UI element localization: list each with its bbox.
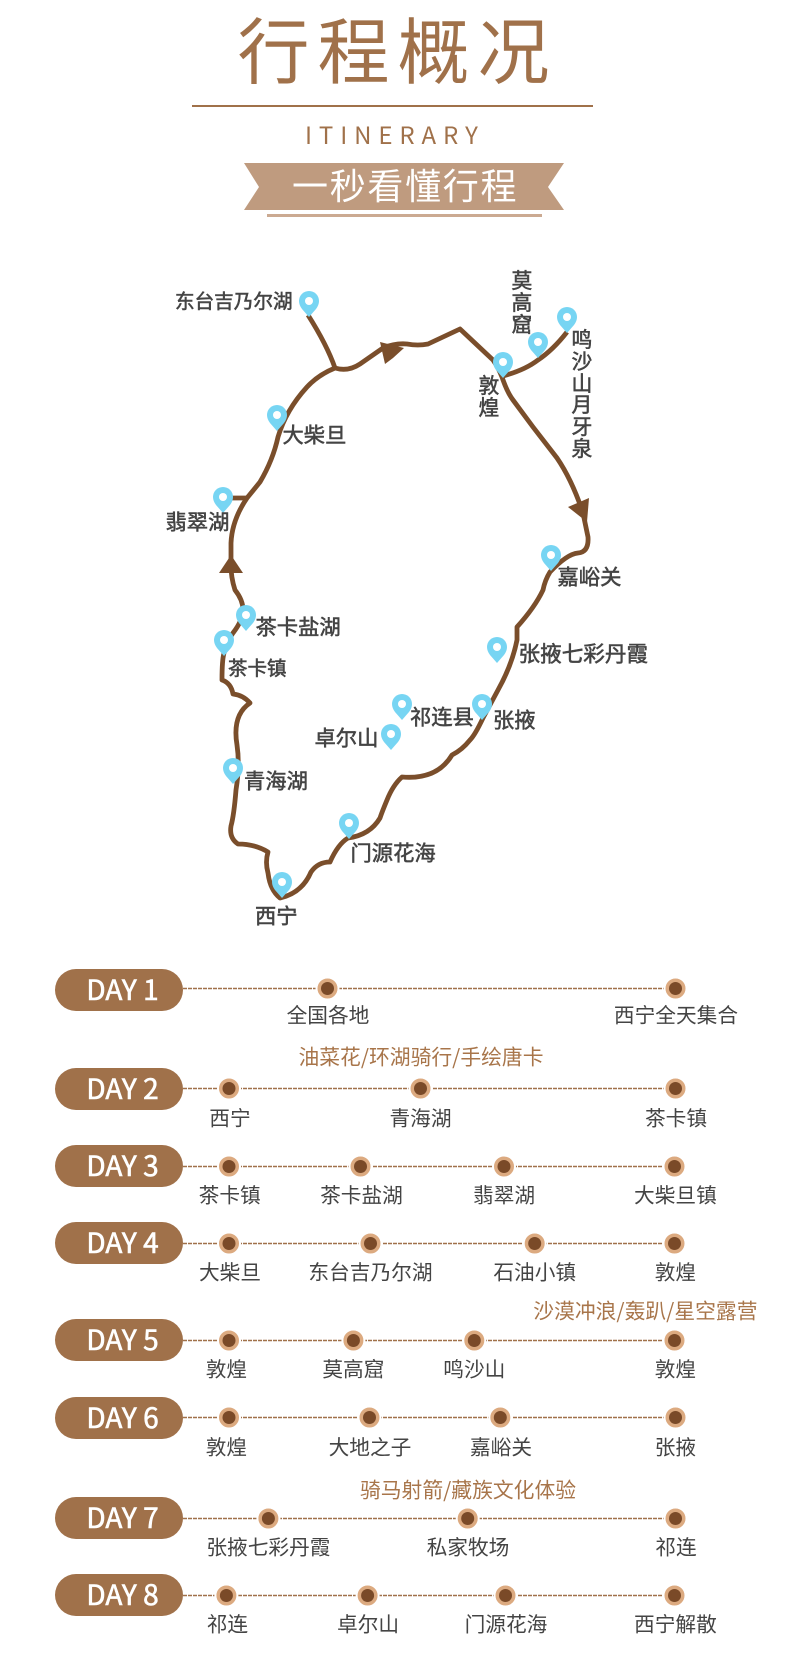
map label: 翡翠湖: 翡翠湖 [166,506,229,536]
day 6 badge: DAY 6 [86,1397,159,1437]
day 4 stops: 石油小镇 [493,1256,576,1286]
day 4 badge: DAY 4 [86,1222,159,1262]
branch: 东台吉乃尔湖 [308,315,335,368]
day 5 badge [55,1319,183,1361]
day 3 stops: 大柴旦镇 [634,1178,717,1208]
day 1 badge [55,969,183,1011]
day 2 badge: DAY 2 [86,1068,159,1108]
map label: 东台吉乃尔湖: 东台吉乃尔湖 [175,285,293,314]
itinerary: day 7 [55,1497,697,1560]
branch: 翡翠湖 [230,496,247,500]
itinerary: day 1 [55,969,738,1028]
day 7 stops: 祁连 [655,1530,697,1560]
day 8 badge [55,1574,183,1616]
day 7 stops: 张掖七彩丹霞 [206,1530,330,1560]
day 7 stops: 私家牧场 [427,1530,509,1560]
highlight: day 2: 油菜花/环湖骑行/手绘唐卡 [298,1040,544,1070]
day 6 stops: 嘉峪关 [470,1430,532,1460]
pin: 敦煌 [493,352,513,378]
itinerary: day 5 [55,1319,696,1382]
map label: 嘉峪关: 嘉峪关 [558,560,621,592]
day 8 badge: DAY 8 [86,1574,159,1614]
pin: 西宁 [272,872,292,898]
map label: 大柴旦: 大柴旦 [282,418,346,450]
day 3 badge [55,1145,183,1187]
map label: 莫高窟: 高 [512,286,532,316]
map label: 茶卡盐湖: 茶卡盐湖 [256,610,341,642]
pin: 嘉峪关 [541,545,561,571]
day 8 stops: 西宁解散 [634,1608,717,1638]
day 4 stops [199,1256,696,1286]
map label: 张掖七彩丹霞: 张掖七彩丹霞 [518,638,648,668]
pin: 大柴旦 [267,405,287,431]
day 6 stops [206,1430,696,1460]
arrow: top [380,342,404,364]
day 7 badge: DAY 7 [86,1497,159,1537]
day 6 timeline [183,1406,686,1428]
route map [166,264,648,930]
highlight: day 7: 骑马射箭/藏族文化体验 [360,1474,576,1504]
pin: 翡翠湖 [213,487,233,513]
branch: 鸣沙山 [503,332,567,376]
map label: 莫高窟: 窟 [512,308,532,338]
map label: 鸣沙山月牙泉: 泉 [572,432,592,462]
day 4 badge [55,1222,183,1264]
arrow: right [568,498,589,522]
pin: 茶卡镇 [214,630,234,656]
pin: 鸣沙山 [557,307,577,333]
day 5 stops: 敦煌 [206,1352,247,1382]
pin: 卓尔山 [381,724,401,750]
day 5 stops [206,1352,696,1382]
map label: 门源花海: 门源花海 [350,836,436,868]
day 3 stops [199,1178,717,1208]
day 4 stops: 敦煌 [655,1256,696,1286]
itinerary: day 2 [55,1068,707,1132]
day 1 timeline [183,978,686,1000]
map label: 敦煌 [478,369,500,421]
itinerary: day 3 [55,1145,717,1208]
day 1 stops: 西宁全天集合 [614,998,738,1028]
ribbon banner [244,158,564,217]
day 6 stops: 张掖 [655,1430,696,1460]
map label: 鸣沙山月牙泉 [572,323,592,462]
day 7 timeline [183,1508,686,1530]
map label: 西宁: 西宁 [255,900,298,930]
day 4 stops: 大柴旦 [199,1256,261,1286]
map label: 鸣沙山月牙泉: 鸣 [572,323,592,353]
day 1 badge: DAY 1 [86,969,159,1009]
map label: 鸣沙山月牙泉: 山 [572,367,592,397]
map label: 鸣沙山月牙泉: 月 [572,388,592,418]
map label: 鸣沙山月牙泉: 牙 [572,410,592,440]
map label: 莫高窟 [512,264,532,338]
map label: 青海湖: 青海湖 [244,764,308,796]
day 8 timeline [183,1584,686,1606]
day 2 badge [55,1068,183,1110]
highlight: day 5: 沙漠冲浪/轰趴/星空露营 [533,1294,758,1324]
day 4 timeline [183,1232,686,1254]
title rule [192,105,593,107]
subtitle: ITINERARY: ITINERARY [305,116,485,151]
day 1 stops [287,998,738,1028]
day 3 badge: DAY 3 [86,1145,159,1185]
day 1 stops: 全国各地 [287,998,369,1028]
day 6 badge [55,1397,183,1439]
itinerary: day 6 [55,1397,696,1460]
day 2 stops: 西宁 [209,1102,251,1132]
map label: 敦煌: 敦 [478,369,500,399]
day 2 timeline [183,1078,686,1100]
pin: 莫高窟 [528,332,548,358]
day 3 stops: 茶卡镇 [199,1178,261,1208]
ribbon banner: 一秒看懂行程 [292,158,518,210]
day 8 stops: 卓尔山 [337,1608,399,1638]
day 5 stops: 莫高窟 [322,1352,384,1382]
pin: 张掖七彩丹霞 [487,637,507,663]
day 7 stops [206,1530,697,1560]
day 3 stops: 茶卡盐湖 [320,1178,403,1208]
day 2 stops: 茶卡镇 [645,1102,707,1132]
day 8 stops [207,1608,717,1638]
day 6 stops: 大地之子 [329,1430,411,1460]
map label: 茶卡镇: 茶卡镇 [228,652,287,681]
pin: 张掖 [472,694,492,720]
itinerary: day 8 [55,1574,717,1638]
day 4 stops: 东台吉乃尔湖 [308,1256,433,1286]
map label: 祁连县: 祁连县 [410,700,474,732]
route line [222,329,588,898]
day 7 badge [55,1497,183,1539]
pin: 东台吉乃尔湖 [299,291,319,317]
day 6 stops: 敦煌 [206,1430,247,1460]
pin: 祁连县 [392,694,412,720]
day 2 stops: 青海湖 [389,1102,452,1132]
map label: 敦煌: 煌 [478,391,499,421]
map label: 张掖: 张掖 [493,704,536,734]
day 5 stops: 鸣沙山 [443,1352,505,1382]
map label: 莫高窟: 莫 [512,264,532,294]
day 3 timeline [183,1156,686,1178]
pin: 茶卡盐湖 [236,605,256,631]
day 2 stops [209,1102,707,1132]
pin: 青海湖 [223,758,243,784]
day 8 stops: 门源花海 [465,1608,547,1638]
day 5 stops: 敦煌 [655,1352,696,1382]
itinerary: day 4 [55,1222,696,1286]
map label: 鸣沙山月牙泉: 沙 [572,345,592,375]
day 5 timeline [183,1330,686,1352]
day 8 stops: 祁连 [207,1608,248,1638]
arrow: left [219,555,243,573]
pin: 门源花海 [339,813,359,839]
day 3 stops: 翡翠湖 [473,1178,535,1208]
map label: 卓尔山: 卓尔山 [314,722,378,752]
day 5 badge: DAY 5 [86,1319,159,1359]
